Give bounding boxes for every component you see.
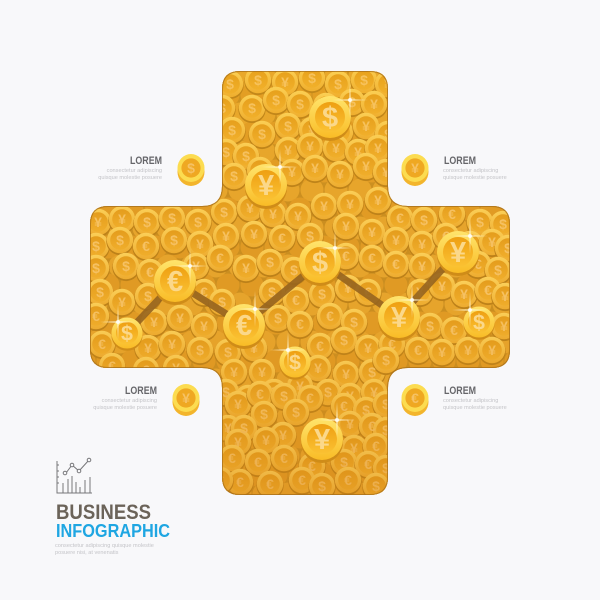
coin: yen right: ¥ <box>391 302 407 334</box>
callout: bottom left: consectetur adipiscing <box>102 398 157 404</box>
coin: small dollar right: $ <box>473 310 485 334</box>
callout: bottom left: quisque molestie posuere <box>93 405 157 411</box>
coin: small dollar right <box>463 306 495 340</box>
coin: dollar centre <box>299 241 341 286</box>
icon: dollar coin: $ <box>187 160 195 176</box>
sparkles <box>100 82 488 438</box>
callout: top right: quisque molestie posuere <box>443 175 507 181</box>
panel: plus-shaped coin pile: €€¥¥¥¥¥$$ <box>108 352 390 382</box>
panel: plus-shaped coin pile: ¥€$€€$$ <box>234 386 390 418</box>
callout: bottom right: consectetur adipiscing <box>443 398 498 404</box>
callout: top left <box>98 155 162 181</box>
text block: description <box>55 543 154 556</box>
panel: plus-shaped coin pile: $¥$€$$€$¥€¥¥¥€¥ <box>96 278 509 310</box>
panel: plus-shaped coin pile: $$¥¥¥¥¥ <box>222 138 382 164</box>
callout: top left: consectetur adipiscing <box>107 168 162 174</box>
panel: plus-shaped coin pile: €¥¥$$¥€$¥€€¥¥¥ <box>98 332 496 360</box>
callout: bottom right <box>443 385 507 411</box>
icon: yen coin <box>172 384 200 416</box>
icon: yen coin <box>402 154 428 186</box>
coin: euro lower: € <box>236 310 252 342</box>
coin: top dollar: $ <box>322 102 338 134</box>
coin: small dollar centre: $ <box>289 350 301 374</box>
icon: chart <box>57 458 92 493</box>
coin: yen far right <box>437 231 479 276</box>
text block: description: consectetur adipiscing quisque molestie <box>55 543 154 549</box>
icon: yen coin: ¥ <box>182 390 190 406</box>
panel: plus-shaped coin pile <box>82 65 522 501</box>
panel: plus-shaped coin pile: €€€€$€$ <box>228 450 390 476</box>
coin: yen right <box>378 296 420 341</box>
icon: euro coin: € <box>411 390 419 406</box>
coin: top yen: ¥ <box>258 170 274 202</box>
panel: plus-shaped coin pile: $$€$¥¥¥€$¥¥¥¥€¥¥$ <box>92 218 512 256</box>
coin: small dollar centre <box>279 346 311 380</box>
icon: euro coin <box>402 384 428 416</box>
coin: small dollar left: $ <box>121 321 133 345</box>
coin: small dollar left <box>111 317 143 351</box>
text block: description: posuere nisi, at venenatis <box>55 550 119 556</box>
coin: top yen <box>245 164 287 209</box>
panel: plus-shaped coin pile: ¥¥$$$$¥¥¥¥¥¥€$€$$ <box>94 192 507 232</box>
callout: top right: LOREM <box>444 155 476 167</box>
panel: plus-shaped coin pile: ¥$$¥€$ <box>224 404 390 438</box>
callout: top left: LOREM <box>130 155 162 167</box>
callout: bottom left <box>93 385 157 411</box>
coin: yen far right: ¥ <box>450 237 466 269</box>
coin: euro: € <box>167 266 183 298</box>
callout: top right: consectetur adipiscing <box>443 168 498 174</box>
coin: euro lower <box>223 304 265 349</box>
callout: bottom left: LOREM <box>125 385 157 397</box>
coin: top dollar <box>309 96 351 141</box>
coin: euro <box>154 260 196 305</box>
panel: plus-shaped coin pile: $€$¥$¥¥ <box>222 378 378 406</box>
panel: plus-shaped coin pile: $$$¥¥¥$ <box>228 118 392 142</box>
callout: top left: quisque molestie posuere <box>98 175 162 181</box>
icon: yen coin: ¥ <box>411 160 419 176</box>
panel: plus-shaped coin pile: $$$$$$¥ <box>218 92 378 116</box>
callout: bottom right: quisque molestie posuere <box>443 405 507 411</box>
panel: plus-shaped coin pile: €¥¥¥$€€$$€¥ <box>92 308 508 338</box>
callout: bottom right: LOREM <box>444 385 476 397</box>
callout: top right <box>443 155 507 181</box>
title: BUSINESS <box>56 500 151 524</box>
title: INFOGRAPHIC <box>56 521 170 541</box>
coin: dollar centre: $ <box>312 247 328 279</box>
panel: plus-shaped coin pile: $$€¥€¥$$€€€¥€$ <box>92 248 502 280</box>
icon: dollar coin <box>178 154 204 186</box>
panel: plus-shaped coin pile: €€€$€$€ <box>216 472 380 494</box>
title <box>56 500 170 541</box>
chart: trend line <box>127 252 458 333</box>
panel: plus-shaped coin pile: $$¥¥¥¥¥ <box>230 158 390 184</box>
coin: bottom yen: ¥ <box>314 424 330 456</box>
panel: plus-shaped coin pile: $$¥$$$¥ <box>226 70 392 92</box>
panel: plus-shaped coin pile: $¥¥¥¥€ <box>234 420 380 456</box>
coin: bottom yen <box>301 418 343 463</box>
